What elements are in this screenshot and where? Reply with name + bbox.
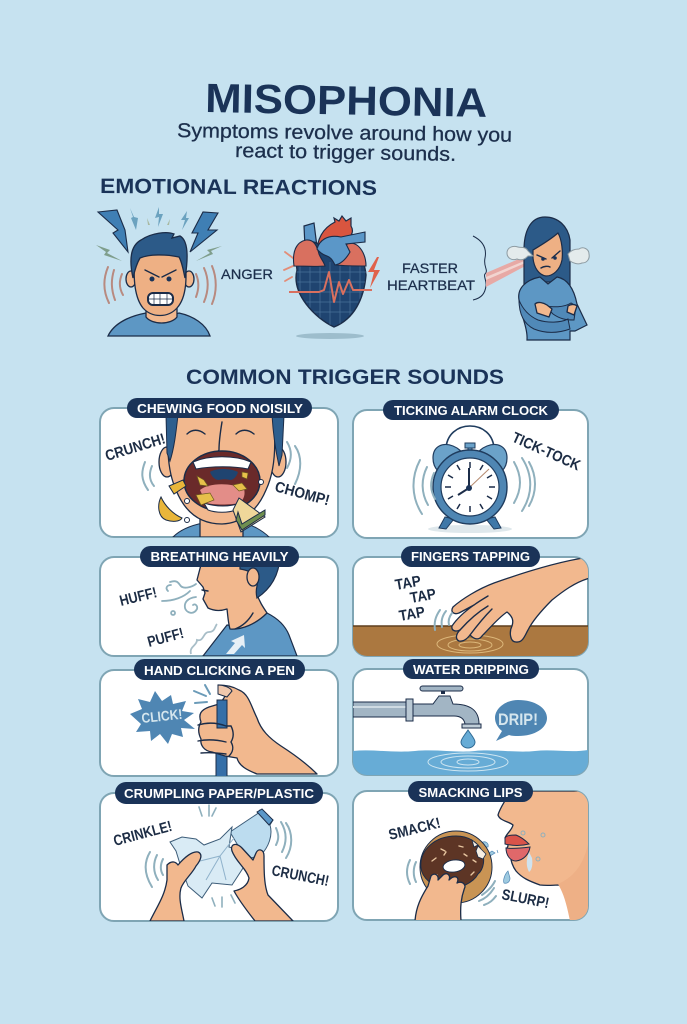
label pill: BREATHING HEAVILY [150, 549, 289, 564]
illustration: hand with pen [198, 685, 317, 777]
label pill [408, 781, 533, 802]
icon: heart [284, 216, 380, 339]
label pill [127, 398, 312, 418]
illustration: hands crumpling [146, 805, 293, 921]
bracket [473, 236, 486, 300]
illustration: face and donut [407, 791, 590, 922]
sound word: huff: HUFF! [118, 584, 159, 610]
label: faster heartbeat [387, 260, 475, 293]
panel: chewing food noisily [100, 398, 338, 537]
illustration: hand on wood [353, 557, 590, 657]
label pill: CRUMPLING PAPER/PLASTIC [124, 786, 315, 801]
title: MISOPHONIA [205, 75, 488, 126]
heading: emotional reactions: EMOTIONAL REACTIONS [100, 175, 377, 200]
speech bubble: drip: DRIP! [498, 710, 538, 729]
sound word: puff: PUFF! [146, 625, 186, 651]
label pill: SMACKING LIPS [418, 785, 523, 800]
label pill: HAND CLICKING A PEN [144, 663, 295, 678]
label pill [383, 400, 559, 420]
panel: water dripping [353, 659, 588, 777]
icon: water drop [461, 730, 475, 748]
speech bubble: drip [495, 700, 547, 741]
sound word: crinkle: CRINKLE! [112, 818, 174, 850]
subtitle: react to trigger sounds. [235, 140, 456, 166]
label pill [140, 546, 299, 567]
subtitle: Symptoms revolve around how you [177, 120, 512, 147]
sound word: slurp: SLURP! [500, 886, 551, 912]
label: faster heartbeat: HEARTBEAT [387, 277, 475, 293]
label pill: TICKING ALARM CLOCK [394, 403, 549, 418]
sound word: crunch: CRUNCH! [270, 862, 330, 890]
sound words: tap tap tap: TAP [398, 604, 426, 625]
illustration: click burst: CLICK! [141, 706, 183, 726]
subtitle [177, 120, 512, 166]
sound words: tap tap tap: TAP [409, 586, 437, 607]
illustration: man breathing [162, 557, 297, 656]
panel: ticking alarm clock [353, 400, 588, 538]
sound words: tap tap tap [394, 573, 437, 625]
panel: hand clicking a pen [100, 659, 338, 777]
label pill [115, 782, 323, 804]
sound word: chomp: CHOMP! [273, 478, 331, 509]
icon: angry man [96, 207, 222, 336]
label pill [403, 659, 539, 679]
panel: crumpling paper/plastic [100, 782, 338, 921]
heading: common trigger sounds: COMMON TRIGGER SOUNDS [186, 366, 504, 389]
label pill: FINGERS TAPPING [411, 549, 530, 564]
sound words: tap tap tap: TAP [394, 573, 422, 594]
sound word: tick-tock: TICK-TOCK [509, 429, 583, 474]
label pill [401, 546, 540, 567]
label: anger: ANGER [221, 266, 273, 282]
panel: fingers tapping [353, 546, 590, 657]
illustration: water surface [353, 686, 588, 777]
illustration: click burst [130, 685, 210, 744]
panel: smacking lips [353, 781, 590, 922]
sound word: crunch: CRUNCH! [103, 430, 167, 465]
panel: breathing heavily [100, 546, 338, 656]
illustration: chewing face [142, 415, 300, 537]
illustration: faucet [353, 686, 481, 728]
label pill: WATER DRIPPING [413, 662, 529, 677]
icon: angry woman [486, 217, 589, 340]
label: faster heartbeat: FASTER [402, 260, 458, 276]
label pill: CHEWING FOOD NOISILY [137, 401, 303, 416]
label pill [134, 659, 305, 680]
sound word: smack: SMACK! [387, 815, 442, 844]
illustration: alarm clock [413, 426, 535, 533]
